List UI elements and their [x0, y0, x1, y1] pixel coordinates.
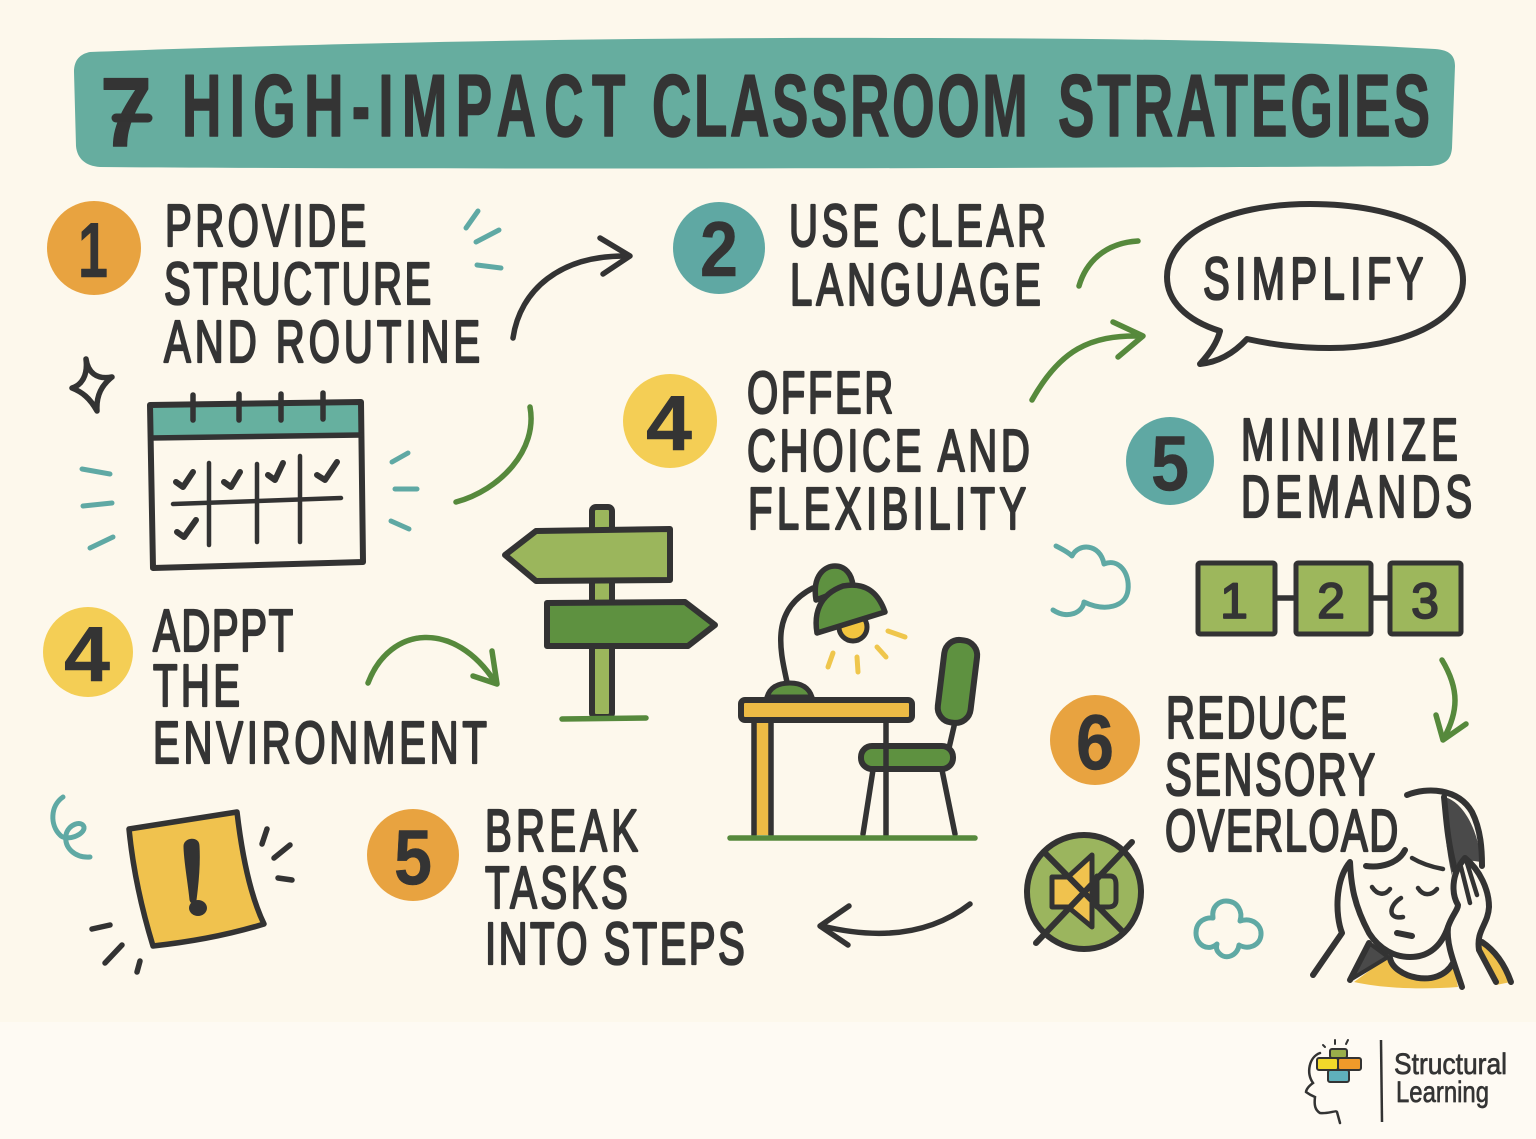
cloud outline — [1053, 546, 1128, 615]
number chain 1 2 3 — [1198, 563, 1461, 634]
strategy 2 heading: USE CLEAR — [789, 192, 1046, 259]
strategy 1 heading: STRUCTURE — [164, 250, 431, 317]
strategy: adapt environment — [153, 597, 487, 776]
number chain 1 2 3: 1 — [1220, 573, 1248, 629]
strategy: break tasks: INTO STEPS — [485, 910, 745, 977]
green down arrow — [1436, 660, 1466, 740]
title banner: STRATEGIES — [1058, 57, 1430, 155]
green arrow adapt — [368, 637, 497, 684]
icon: muted speaker — [1027, 835, 1141, 949]
strategy: reduce sensory overload: SENSORY — [1165, 741, 1375, 808]
arrow: 1 to 2 — [513, 238, 630, 338]
badge 1: 1 — [78, 206, 108, 294]
strategy: break tasks: TASKS — [485, 854, 628, 921]
strategy: minimize demands: MINIMIZE — [1241, 406, 1458, 473]
speech bubble: simplify: SIMPLIFY — [1203, 245, 1423, 312]
strategy: break tasks: BREAK — [485, 797, 638, 864]
accent dashes: calendar left — [82, 469, 113, 548]
sticky note alert icon — [92, 812, 292, 972]
badge 4: 4 — [646, 379, 692, 467]
strategy 2 heading — [789, 192, 1046, 318]
accent dashes — [466, 211, 501, 268]
strategy: reduce sensory overload: REDUCE — [1166, 684, 1347, 751]
accent dashes: calendar right — [391, 453, 417, 529]
strategy: adapt environment: ENVIRONMENT — [153, 709, 487, 776]
icon: desk lamp and chair — [730, 566, 979, 838]
small cloud outline — [1196, 901, 1261, 957]
badge 2: 2 — [700, 205, 738, 293]
badge 4 left — [43, 607, 133, 698]
strategy 1 heading: AND ROUTINE — [164, 308, 480, 375]
strategy 1 heading: PROVIDE — [165, 192, 366, 259]
strategy: break tasks — [485, 797, 745, 977]
logo: structural learning: Structural — [1394, 1048, 1507, 1081]
number chain 1 2 3: 3 — [1411, 573, 1439, 629]
badge 5 orange — [367, 809, 459, 901]
badge 6 — [1050, 695, 1140, 786]
strategy: adapt environment: ADPPT — [153, 597, 293, 664]
strategy: reduce sensory overload: OVERLOAD — [1165, 797, 1398, 864]
strategy: offer choice: OFFER — [747, 359, 893, 426]
strategy 2 heading: LANGUAGE — [790, 251, 1041, 318]
title banner: CLASSROOM — [652, 57, 1028, 155]
strategy: offer choice: CHOICE AND — [747, 417, 1030, 484]
badge 1 — [47, 201, 141, 295]
strategy: minimize demands: DEMANDS — [1241, 463, 1472, 530]
strategy: offer choice: FLEXIBILITY — [748, 475, 1026, 542]
number chain 1 2 3: 2 — [1317, 573, 1345, 629]
title banner: 7 — [100, 57, 152, 167]
strategy: minimize demands — [1241, 406, 1472, 530]
strategy: reduce sensory overload — [1165, 684, 1398, 864]
badge 5 teal: 5 — [1151, 419, 1189, 507]
icon: calendar — [150, 393, 363, 568]
icon: overwhelmed person — [1313, 791, 1511, 988]
badge 5 orange: 5 — [394, 813, 432, 901]
icon: signpost — [505, 507, 715, 719]
badge 6: 6 — [1076, 698, 1114, 786]
title banner — [74, 38, 1455, 169]
sparkle icon — [72, 359, 112, 411]
badge 4 left: 4 — [64, 610, 110, 698]
green arc — [456, 407, 531, 502]
green curve — [1079, 241, 1138, 286]
logo: structural learning — [1306, 1040, 1507, 1123]
strategy: offer choice — [747, 359, 1030, 542]
logo: structural learning: Learning — [1396, 1076, 1489, 1109]
title banner: HIGH-IMPACT — [182, 57, 625, 155]
badge 4 — [623, 374, 717, 468]
green arrow to bubble — [1032, 322, 1143, 400]
arrow: back to break tasks — [820, 904, 970, 945]
teal swirl — [53, 797, 90, 857]
strategy: adapt environment: THE — [153, 652, 240, 719]
strategy 1 heading — [164, 192, 480, 375]
speech bubble: simplify — [1167, 204, 1463, 364]
badge 2 — [673, 202, 765, 294]
badge 5 teal — [1126, 417, 1214, 507]
